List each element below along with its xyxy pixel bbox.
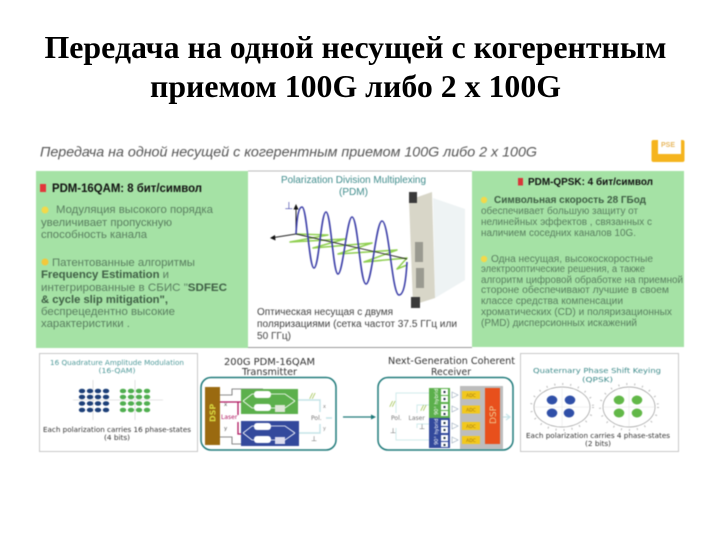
pol and laser labels: // bbox=[420, 404, 428, 412]
ADC and DSP block bbox=[460, 386, 503, 449]
text block: algorithms bbox=[41, 257, 227, 330]
text block: single carrier: классе средства компенсации bbox=[481, 296, 623, 307]
heading: transmitter: 200G PDM-16QAM bbox=[224, 357, 315, 368]
polarization combiner: ⊥ bbox=[311, 435, 317, 443]
title bbox=[44, 29, 666, 104]
yellow bullet bbox=[481, 256, 487, 262]
laser label: Laser bbox=[221, 414, 238, 421]
red bullet bbox=[40, 184, 46, 192]
polarization combiner bbox=[298, 392, 332, 443]
yellow bullet bbox=[481, 197, 487, 203]
panel heading bbox=[50, 359, 184, 375]
panel: receiver diagram bbox=[378, 378, 513, 450]
panel caption: (4 bits) bbox=[104, 434, 130, 442]
panel: transmitter diagram bbox=[201, 378, 336, 450]
title: приемом 100G либо 2 x 100G bbox=[150, 68, 561, 104]
chart: polarization waves bbox=[270, 201, 407, 295]
panel: PDM-16QAM bbox=[36, 171, 248, 348]
polarization combiner: x bbox=[323, 404, 326, 410]
text block: single carrier: электрооптические решения, а также bbox=[481, 264, 645, 275]
green modulator bbox=[241, 389, 298, 414]
green hybrid: 90° hybrid bbox=[434, 389, 440, 415]
caption: поляризациями (сетка частот 37.5 ГГц или bbox=[257, 319, 457, 330]
title: Передача на одной несущей с когерентным bbox=[44, 29, 666, 65]
text block: symbol rate: обеспечивает большую защиту от bbox=[481, 205, 638, 217]
text block: algorithms: беспрецедентно высокие bbox=[41, 306, 175, 318]
pol and laser labels: Laser bbox=[408, 415, 425, 422]
panel caption bbox=[526, 432, 670, 448]
pol and laser labels: ⊥ bbox=[419, 423, 425, 431]
ADC and DSP block: ADC bbox=[466, 393, 476, 399]
laser lines bbox=[220, 402, 241, 434]
panel heading bbox=[533, 367, 661, 384]
chart: blue QPSK bbox=[531, 384, 593, 430]
diagram heading: (PDM) bbox=[339, 187, 368, 198]
panel: PDM-QPSK bbox=[472, 171, 684, 347]
pol and laser labels: // bbox=[389, 400, 397, 408]
pol and laser labels: Pol. bbox=[391, 415, 402, 422]
text block: single carrier: алгоритм цифровой обработке на приемной bbox=[481, 274, 683, 286]
panel heading: 16 Quadrature Amplitude Modulation bbox=[50, 359, 184, 367]
panel heading: PDM-QPSK: 4 бит/символ bbox=[528, 176, 653, 188]
panel heading: Quaternary Phase Shift Keying bbox=[533, 367, 661, 375]
laser label: x bbox=[224, 402, 228, 408]
laser label bbox=[221, 402, 238, 432]
logo badge bbox=[652, 140, 684, 162]
heading: transmitter bbox=[224, 357, 315, 378]
heading: transmitter: Transmitter bbox=[241, 367, 297, 378]
DSP block: DSP bbox=[208, 404, 218, 422]
pol and laser labels: ⊥ bbox=[390, 427, 396, 435]
text block: symbol rate bbox=[481, 195, 652, 239]
caption: 50 ГГц) bbox=[257, 331, 291, 342]
diagram heading: Polarization Division Multiplexing bbox=[281, 175, 426, 186]
input lines bbox=[396, 393, 429, 440]
panel caption: Each polarization carries 16 phase-states bbox=[43, 426, 191, 434]
panel heading: (QPSK) bbox=[582, 376, 613, 384]
wiring bbox=[220, 389, 263, 444]
heading: receiver bbox=[388, 356, 515, 378]
polarization combiner: // bbox=[309, 392, 317, 400]
text block: single carrier: (PMD) дисперсионных искажений bbox=[481, 318, 637, 329]
text block: algorithms: интегрированные в СБИС " SDFEC bbox=[41, 282, 227, 294]
subtitle: Передача на одной несущей с когерентным приемом 100G либо 2 x 100G bbox=[40, 144, 537, 160]
text block: symbol rate: Символьная скорость 28 ГБод bbox=[494, 195, 647, 206]
text block: algorithms: & cycle slip mitigation", bbox=[41, 294, 168, 306]
laser label: y bbox=[224, 426, 228, 432]
polarization combiner: Pol. bbox=[311, 415, 322, 422]
text block: modulation: способность канала bbox=[41, 229, 148, 241]
ADC and DSP block: DSP bbox=[489, 405, 499, 424]
panel heading: PDM-16QAM: 8 бит/символ bbox=[52, 183, 202, 195]
text block: modulation bbox=[41, 204, 214, 241]
text block: single carrier: хроматических (CD) и поляризационных bbox=[481, 307, 672, 318]
text block: algorithms: Frequency Estimation и bbox=[41, 269, 169, 281]
ADC and DSP block: ADC bbox=[466, 438, 476, 444]
yellow bullet bbox=[42, 258, 48, 266]
heading: receiver: Next-Generation Coherent bbox=[388, 356, 515, 367]
logo badge: PSE bbox=[661, 142, 675, 149]
caption: Оптическая несущая с двумя bbox=[257, 307, 393, 318]
heading: receiver: Receiver bbox=[431, 367, 471, 378]
diagram heading bbox=[281, 175, 426, 198]
blue modulator bbox=[241, 421, 299, 446]
text block: algorithms: характеристики . bbox=[41, 318, 130, 330]
panel: PDM diagram bbox=[248, 171, 472, 348]
photodiodes bbox=[452, 392, 458, 443]
panel caption: Each polarization carries 4 phase-states bbox=[526, 432, 670, 440]
slide image bbox=[36, 140, 684, 452]
panel: 16-QAM constellation bbox=[40, 354, 198, 452]
text block: modulation: Модуляция высокого порядка bbox=[56, 204, 214, 216]
polarization combiner: y bbox=[323, 426, 326, 432]
panel heading: (16-QAM) bbox=[98, 367, 136, 375]
chart: polarization waves: ⊥ bbox=[284, 201, 293, 212]
text block: algorithms: Патентованные алгоритмы bbox=[52, 257, 195, 269]
chart: blue and green constellations bbox=[73, 380, 163, 420]
text block: symbol rate: наличием соседних каналов 10G. bbox=[481, 228, 636, 239]
panel caption: (2 bits) bbox=[585, 440, 611, 448]
panel: QPSK constellation bbox=[520, 354, 678, 452]
text block: single carrier: стороне обеспечивают лучшие в своем bbox=[481, 284, 669, 296]
chart: green QPSK bbox=[600, 384, 658, 430]
icon: line card module bbox=[409, 192, 465, 308]
ADC and DSP block: ADC bbox=[466, 408, 476, 414]
text block: symbol rate: нелинейных эффектов , связанных с bbox=[481, 216, 652, 228]
text block: single carrier: Одна несущая, высокоскоростные bbox=[491, 254, 653, 265]
panel caption bbox=[43, 426, 191, 442]
caption bbox=[257, 307, 457, 342]
text block: modulation: увеличивает пропускную bbox=[41, 217, 172, 229]
ADC and DSP block: ADC bbox=[466, 424, 476, 430]
yellow bullet bbox=[42, 206, 48, 214]
arrow: transmitter to receiver bbox=[343, 414, 376, 420]
blue hybrid: 90° hybrid bbox=[434, 419, 440, 445]
output arrow bbox=[503, 414, 510, 420]
pol and laser labels bbox=[389, 400, 428, 435]
red bullet bbox=[518, 178, 523, 186]
text block: single carrier bbox=[481, 254, 683, 329]
